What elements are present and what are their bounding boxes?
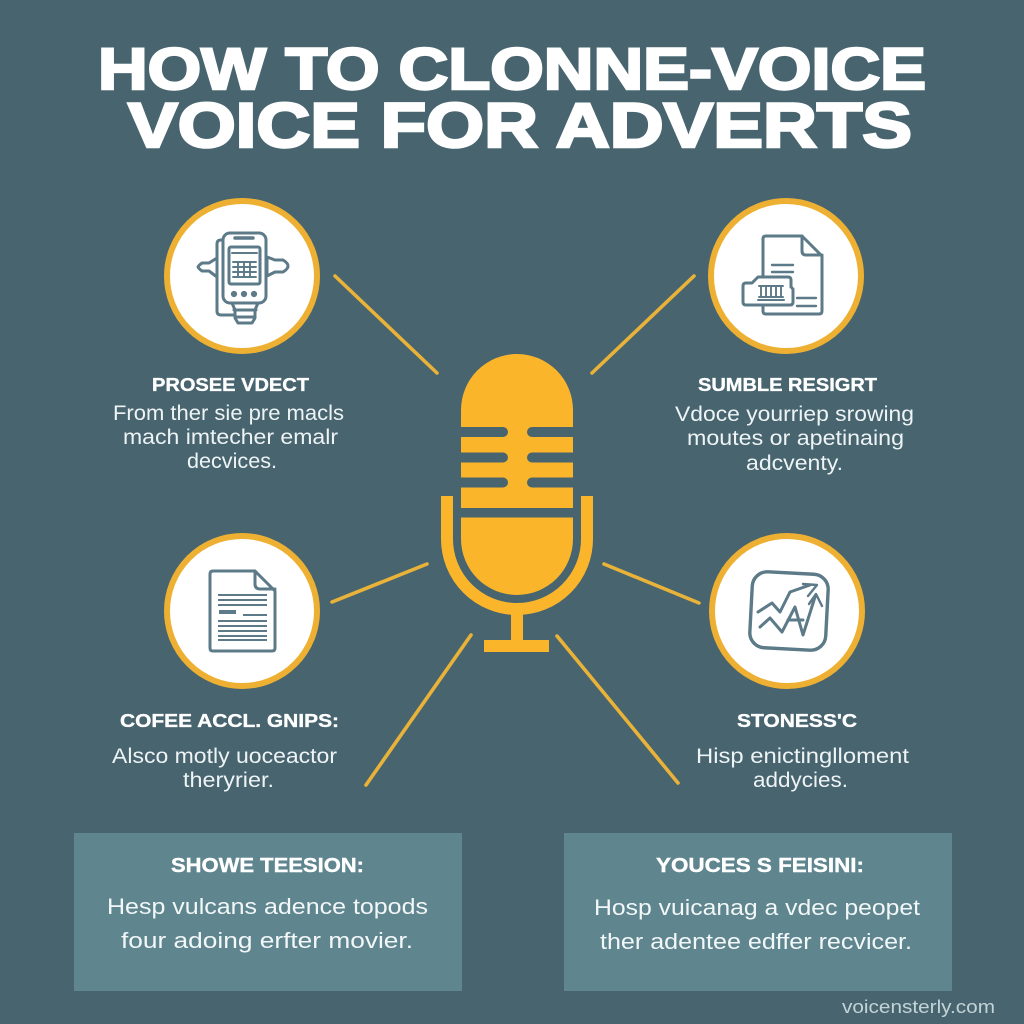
callout heading: SHOWE TEESION: (171, 855, 364, 877)
connector lines to the microphone (332, 276, 699, 785)
panel: top right step (675, 201, 914, 475)
title: VOICE FOR ADVERTS (128, 91, 912, 161)
heading: STONESS'C (737, 711, 857, 731)
callout text (594, 895, 920, 954)
text block (696, 745, 909, 792)
callout text: four adoing erfter movier. (121, 928, 413, 953)
text block: moutes or apetinaing (687, 427, 904, 450)
text block: adcventy. (746, 452, 843, 475)
callout text (107, 894, 428, 953)
text block: theryrier. (183, 769, 274, 792)
icon: central microphone (447, 354, 587, 652)
text block: Hisp enictinglloment (696, 745, 909, 768)
panel: lower left step (112, 536, 339, 792)
panel: lower right step (696, 536, 909, 792)
icon: growth chart badge (712, 536, 862, 686)
title (98, 37, 926, 161)
text block: mach imtecher emalr (123, 426, 338, 449)
heading: COFEE ACCL. GNIPS: (120, 711, 339, 731)
text block: Vdoce yourriep srowing (675, 403, 914, 426)
heading: PROSEE VDECT (152, 375, 309, 395)
callout text: Hosp vuicanag a vdec peopet (594, 895, 920, 920)
title: HOW TO CLONNE-VOICE (98, 37, 926, 102)
icon: text document (167, 536, 317, 686)
text block: addycies. (753, 769, 848, 792)
icon: document with battery (711, 201, 861, 351)
callout text: ther adentee edffer recvicer. (600, 929, 912, 954)
icon: phone device with connectors (167, 201, 317, 351)
heading: SUMBLE RESIGRT (698, 375, 877, 395)
panel: bottom right callout (564, 833, 952, 991)
text block: decvices. (187, 450, 277, 473)
website footer: voicensterly.com (842, 997, 995, 1017)
panel: bottom left callout (74, 833, 462, 991)
panel: top left step (113, 201, 344, 473)
text block (675, 403, 914, 475)
text block (113, 402, 344, 473)
text block: From ther sie pre macls (113, 402, 344, 425)
text block (112, 745, 337, 792)
callout heading: YOUCES S FEISINI: (656, 855, 864, 877)
text block: Alsco motly uoceactor (112, 745, 337, 768)
callout text: Hesp vulcans adence topods (107, 894, 428, 919)
